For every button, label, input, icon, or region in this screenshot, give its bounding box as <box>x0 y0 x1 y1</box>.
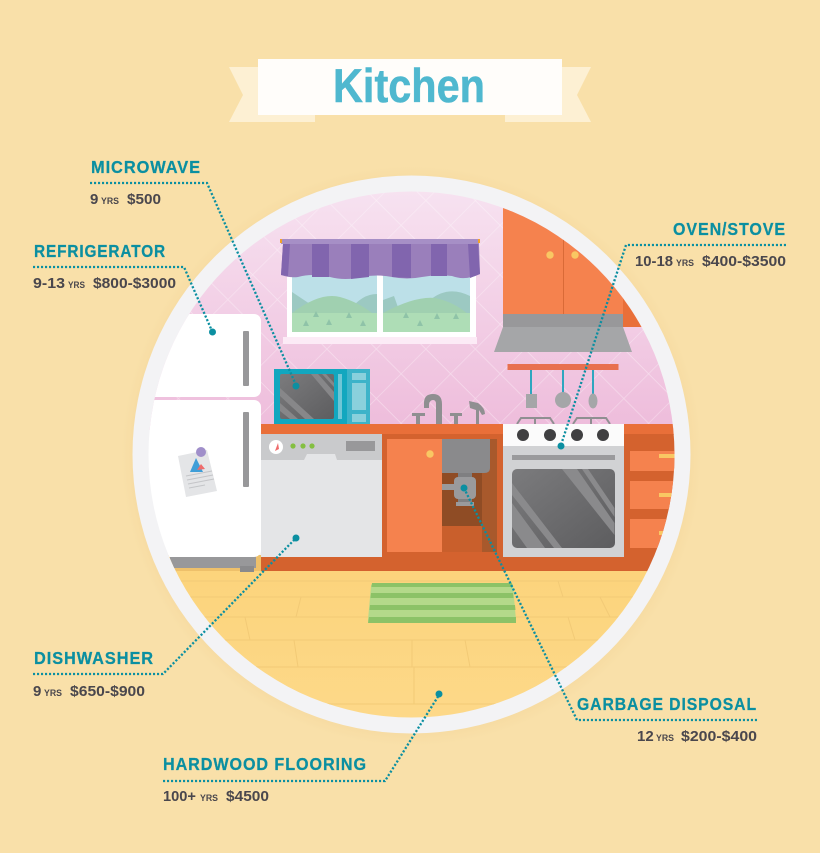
title banner <box>229 59 591 122</box>
callout: oven and stove: $400-$3500 <box>702 253 786 270</box>
callout: microwave: YRS <box>101 196 119 207</box>
callout: garbage disposal <box>460 484 757 745</box>
microwave <box>274 369 370 424</box>
callout: hardwood flooring <box>163 690 442 805</box>
faucet <box>412 394 485 424</box>
callout: refrigerator: REFRIGERATOR <box>34 241 166 261</box>
kitchen interior <box>130 185 685 731</box>
countertop <box>261 424 681 435</box>
sink cabinet <box>387 439 497 552</box>
fridge note <box>178 447 217 497</box>
lower cabinet base <box>261 434 681 572</box>
callout: refrigerator <box>33 241 216 336</box>
garbage disposal <box>442 473 476 506</box>
callout: hardwood flooring: YRS <box>200 793 218 804</box>
callout: dishwasher: YRS <box>44 688 62 699</box>
callout: dishwasher: 9 <box>33 683 41 700</box>
wall <box>140 185 685 430</box>
callout: refrigerator: YRS <box>68 280 85 291</box>
window <box>283 275 477 344</box>
oven <box>503 424 624 557</box>
callout: microwave <box>90 157 300 390</box>
utensil rack <box>508 364 618 408</box>
callout: hardwood flooring: $4500 <box>226 788 269 805</box>
side drawers <box>630 451 674 548</box>
stove grates <box>517 418 610 424</box>
callout: refrigerator: $800-$3000 <box>93 275 176 292</box>
callout: oven and stove: 10-18 <box>635 253 673 270</box>
callout: microwave: MICROWAVE <box>91 157 201 177</box>
callout: dishwasher: $650-$900 <box>70 683 145 700</box>
callout: garbage disposal: YRS <box>656 733 674 744</box>
callout: garbage disposal: 12 <box>637 728 654 745</box>
upper cabinet <box>503 205 653 327</box>
range hood <box>494 314 632 352</box>
refrigerator <box>148 314 261 572</box>
curtain <box>280 239 480 279</box>
title: Kitchen <box>333 59 485 112</box>
callout: hardwood flooring: HARDWOOD FLOORING <box>163 754 367 774</box>
dishwasher <box>261 434 382 557</box>
callout: garbage disposal: GARBAGE DISPOSAL <box>577 694 757 714</box>
callout: refrigerator: 9-13 <box>33 275 65 292</box>
circular kitchen scene <box>122 166 702 746</box>
rug <box>368 583 516 623</box>
callout: oven and stove <box>558 219 786 450</box>
callout: microwave: 9 <box>90 191 98 208</box>
floor <box>168 555 648 718</box>
callout: oven and stove: YRS <box>676 258 694 269</box>
callout: dishwasher: DISHWASHER <box>34 648 154 668</box>
callout: microwave: $500 <box>127 191 161 208</box>
callout: garbage disposal: $200-$400 <box>681 728 757 745</box>
callout: oven and stove: OVEN/STOVE <box>673 219 786 239</box>
callout: dishwasher <box>33 534 300 700</box>
callout: hardwood flooring: 100+ <box>163 788 196 805</box>
